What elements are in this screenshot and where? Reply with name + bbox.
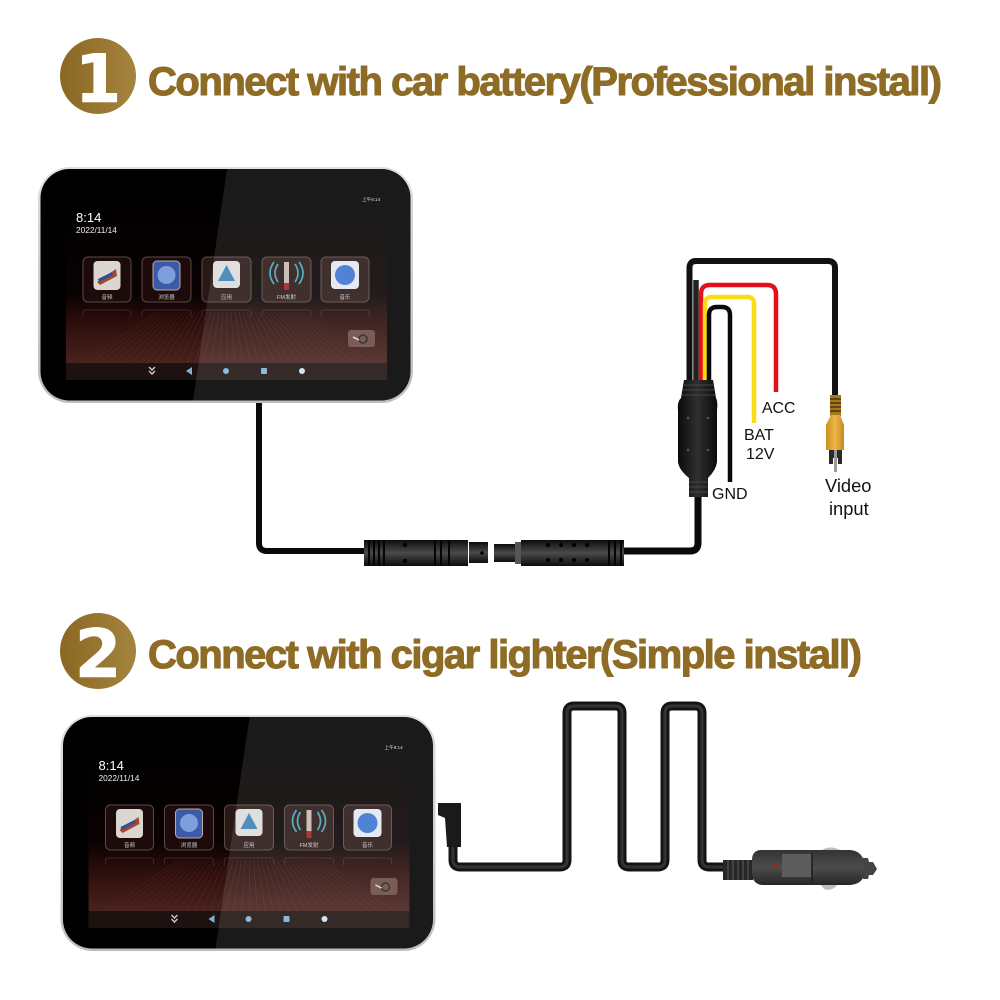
nav icons (149, 367, 305, 375)
monitor 2 date: 2022/11/14 (98, 773, 140, 783)
harness cable right (624, 495, 698, 551)
settings button (370, 878, 398, 895)
label: BAT: BAT (744, 427, 774, 444)
video wire (690, 261, 835, 395)
app: FM transmitter (284, 805, 334, 850)
app: FM transmitter (262, 257, 311, 302)
monitor 2 bezel (60, 715, 436, 951)
app: apps (202, 257, 251, 302)
monitor 1 nav bar (66, 363, 387, 380)
monitor 2 nav bar (88, 911, 410, 928)
label: ACC: ACC (762, 400, 795, 417)
app: apps: 应用 (243, 841, 255, 849)
monitor 2 screen (88, 738, 410, 928)
monitor 2 (60, 715, 436, 951)
app: browser (164, 805, 214, 850)
monitor 2 floor lines (106, 860, 394, 911)
monitor 1 screen (66, 190, 387, 380)
app: music: 音乐 (339, 293, 351, 301)
icon tile reflections (106, 858, 392, 865)
step 1 number badge (60, 38, 136, 118)
app: audio: 音频 (124, 841, 135, 849)
cigar lighter cable (453, 706, 724, 867)
step 1 number badge: 1 (75, 40, 121, 118)
step 1 heading: Connect with car battery(Professional install) (148, 60, 942, 104)
app: apps (224, 805, 274, 850)
harness cable left (259, 403, 365, 551)
black GND wire (709, 307, 730, 482)
female connector (494, 540, 624, 566)
app: music: 音乐 (362, 841, 373, 849)
label: GND: GND (712, 486, 748, 503)
monitor 1 date: 2022/11/14 (76, 225, 117, 235)
junction moulding (678, 380, 717, 497)
app: audio (106, 805, 154, 850)
cigar lighter plug (723, 848, 877, 890)
monitor 2 glass reflection (216, 717, 433, 948)
step 2 number badge (60, 613, 136, 693)
step 2 heading: Connect with cigar lighter(Simple install) (148, 633, 862, 677)
monitor 1 (38, 167, 413, 403)
red ACC wire (701, 285, 776, 392)
second black wire (693, 280, 699, 382)
monitor 1 status: 上午8:14 (362, 196, 381, 203)
app: FM transmitter: FM发射 (300, 841, 319, 849)
yellow BAT wire (705, 297, 754, 423)
monitor 1 floor lines (83, 312, 371, 363)
monitor 2 clock: 8:14 (98, 758, 124, 773)
label: Video: Video (825, 475, 871, 496)
app: apps: 应用 (221, 293, 232, 301)
app: browser: 浏览器 (158, 293, 175, 301)
app: audio: 音频 (101, 293, 113, 301)
icon tile reflections (83, 310, 369, 317)
nav icons (172, 915, 328, 923)
step 2 number badge: 2 (75, 615, 121, 693)
app: FM transmitter: FM发射 (277, 293, 296, 301)
app: music (321, 257, 369, 302)
app: audio (83, 257, 131, 302)
monitor 1 bezel (38, 167, 413, 403)
monitor 1 glass reflection (193, 169, 410, 400)
male connector (364, 540, 488, 566)
monitor 1 clock: 8:14 (76, 210, 101, 225)
label: 12V: 12V (746, 446, 775, 463)
RCA video plug (826, 395, 844, 472)
right-angle power plug (438, 803, 461, 847)
monitor 2 status: 上午8:14 (384, 744, 403, 751)
app: browser (142, 257, 191, 302)
app: browser: 浏览器 (181, 841, 198, 849)
settings button (348, 330, 375, 347)
app: music (344, 805, 392, 850)
label: input: input (829, 498, 869, 519)
